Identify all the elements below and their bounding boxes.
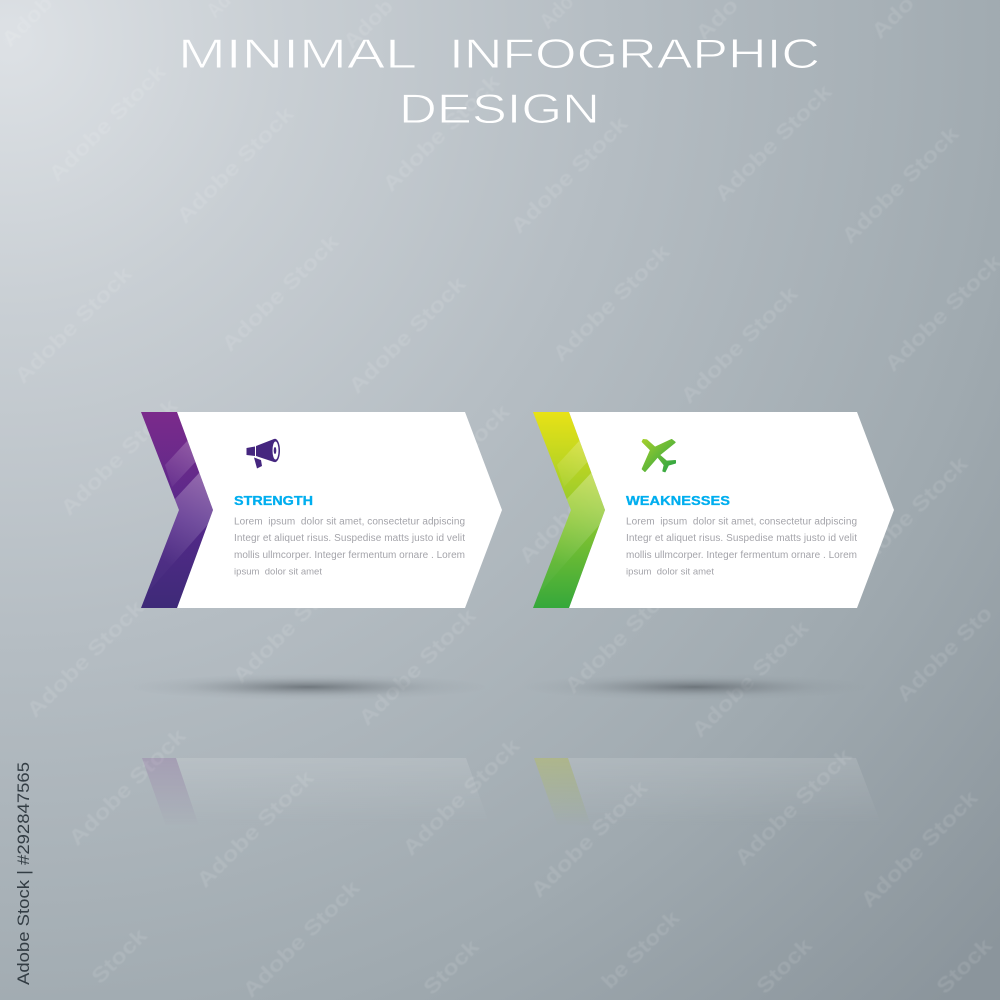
- watermark pattern: Adobe Stock: [548, 240, 675, 366]
- title: DESIGN: [399, 85, 600, 132]
- watermark pattern: Stock: [752, 934, 817, 999]
- watermark pattern: Adob: [339, 0, 398, 54]
- watermark pattern: Adobe Stock: [560, 572, 687, 698]
- watermark pattern: Adobe Stock: [22, 596, 149, 722]
- icon: megaphone: [246, 439, 280, 468]
- watermark pattern: Ado: [691, 0, 743, 46]
- icon: airplane: [642, 440, 675, 472]
- text block: weaknesses description: ipsum dolor sit amet: [626, 567, 714, 578]
- stock id side label: Adobe Stock | #292847565: [14, 762, 33, 985]
- text block: weaknesses description: mollis ullmcorper. Integer fermentum ornare . Lorem: [626, 550, 857, 561]
- panel: strength arrow card: [140, 412, 502, 608]
- watermark pattern: Adobe Stock: [398, 734, 525, 860]
- text block: strength description: mollis ullmcorper. Integer fermentum ornare . Lorem: [234, 550, 465, 561]
- white arrow body: [569, 412, 894, 608]
- title: [178, 30, 820, 132]
- title: MINIMAL: [178, 30, 417, 77]
- text block: weaknesses description: Lorem ipsum dolor sit amet, consectetur adpiscing: [626, 516, 857, 528]
- shadow: right card: [523, 674, 867, 700]
- green chevron band: [533, 412, 605, 608]
- watermark pattern: be Stock: [597, 906, 685, 994]
- watermark pattern: Adobe Stock: [730, 744, 857, 870]
- watermark pattern: Adobe Stock: [687, 616, 814, 742]
- watermark pattern: Adobe Stock: [64, 724, 191, 850]
- reflection: left card: [142, 758, 490, 826]
- watermark pattern: Adobe Stock: [228, 562, 355, 688]
- purple chevron band: [141, 412, 213, 608]
- watermark pattern: Adobe Stock: [880, 250, 1000, 376]
- watermark pattern: Adobe Stock: [722, 410, 849, 536]
- text block: weaknesses description: Integr et aliquet risus. Suspedise matts justo id velit: [626, 533, 857, 544]
- watermark pattern: Adobe Stock: [344, 272, 471, 398]
- watermark pattern: Adobe Stock: [676, 282, 803, 408]
- watermark pattern: Adobe Stock: [10, 262, 137, 388]
- watermark pattern: Adobe Stock: [354, 604, 481, 730]
- watermark pattern: Adobe Stock: [217, 230, 344, 356]
- watermark pattern: Stock: [419, 935, 484, 1000]
- watermark pattern: Adobe Stock: [514, 442, 641, 568]
- panel: weaknesses arrow card: [532, 412, 894, 608]
- watermark pattern: Adobe Stock: [378, 70, 505, 196]
- reflection: right card: [534, 758, 882, 826]
- text block: strength description: [234, 516, 465, 578]
- title: INFOGRAPHIC: [449, 30, 820, 77]
- watermark pattern: Adobe Stock: [172, 102, 299, 228]
- watermark pattern: Adobe Stock: [44, 60, 171, 186]
- heading: weaknesses: WEAKNESSES: [626, 493, 730, 508]
- text block: strength description: Integr et aliquet risus. Suspedise matts justo id velit: [234, 533, 465, 544]
- watermark pattern: Adobe Stock: [846, 452, 973, 578]
- watermark pattern: Adobe Stock: [856, 786, 983, 912]
- watermark pattern: Adobe Stock: [388, 400, 515, 526]
- watermark pattern: Stock: [932, 934, 997, 999]
- shadow: left card: [130, 674, 486, 700]
- heading: strength: STRENGTH: [234, 493, 313, 508]
- text block: strength description: ipsum dolor sit amet: [234, 567, 322, 578]
- watermark pattern: Adobe Stock: [56, 394, 183, 520]
- white arrow body: [177, 412, 502, 608]
- watermark pattern: Stock: [87, 924, 152, 989]
- watermark pattern: Adobe Stock: [526, 776, 653, 902]
- watermark pattern: Adobe Stock: [710, 80, 837, 206]
- text block: weaknesses description: [626, 516, 857, 578]
- watermark pattern: Adobe Stock: [837, 122, 964, 248]
- text block: strength description: Lorem ipsum dolor sit amet, consectetur adpiscing: [234, 516, 465, 528]
- watermark pattern: Adobe Stock: [238, 876, 365, 1000]
- watermark pattern: Adobe Stock: [192, 766, 319, 892]
- watermark pattern: Adobe Stock: [506, 112, 633, 238]
- watermark pattern: Adobe Sto: [892, 602, 997, 707]
